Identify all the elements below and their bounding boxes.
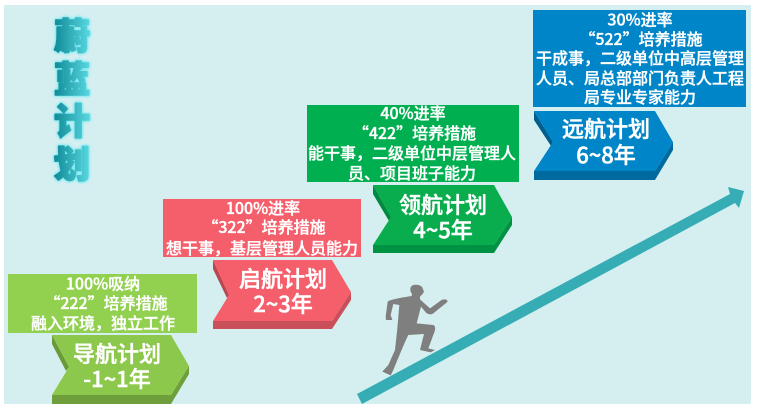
chevron: 导航计划: -1~1年 [83,362,151,394]
title: vertical heading: 蓝 [54,51,90,103]
icon: running person [382,285,447,375]
text box: 导航 measures: 100%吸纳 [66,270,140,294]
text box: 启航 measures: 100%进率 [226,195,300,219]
text box: 远航 measures: “522”培养措施 [579,26,703,50]
chevron: 启航计划: 启航计划 [239,262,327,294]
text box: 远航 measures [533,6,746,108]
title: vertical heading: 划 [54,136,90,188]
title: vertical heading: 计 [54,93,90,145]
text box: 领航 measures: “422”培养措施 [353,120,476,144]
panel: 启航计划 step 2 [163,195,361,329]
chevron: 领航计划: 领航计划 [399,188,487,220]
text box: 导航 measures: “222”培养措施 [44,290,168,314]
text box: 领航 measures [307,100,519,184]
chevron: 启航计划: 2~3年 [253,287,313,319]
title: vertical heading: 蔚 [54,8,90,60]
chevron: 启航计划 [213,260,351,329]
text box: 领航 measures: 40%进率 [380,100,446,124]
chevron: 远航计划: 6~8年 [576,138,636,170]
panel: 远航计划 step 4 [533,6,746,180]
text box: 远航 measures: 干成事，二级单位中高层管理 [536,45,744,69]
chevron: 导航计划: 导航计划 [73,337,161,369]
text box: 领航 measures: 员、项目班子能力 [348,160,476,184]
text box: 启航 measures: 想干事，基层管理人员能力 [166,235,358,259]
chevron: 远航计划: 远航计划 [562,112,650,144]
text box: 启航 measures: “322”培养措施 [202,214,326,238]
text box: 远航 measures: 30%进率 [607,6,673,30]
chevron: 领航计划: 4~5年 [413,213,473,245]
text box: 远航 measures: 人员、局总部部门负责人工程 [536,65,744,89]
text box: 导航 measures: 融入环境，独立工作 [31,310,175,334]
text box: 领航 measures: 能干事，二级单位中层管理人 [308,140,516,164]
arrow: rising growth line [357,187,744,404]
chevron: 领航计划 [373,185,512,253]
title: vertical heading [54,8,90,188]
text box: 远航 measures: 局专业专家能力 [584,84,696,108]
panel: 导航计划 step 1 [8,270,197,404]
text box: 启航 measures [163,195,361,259]
chevron: 远航计划 [534,111,673,180]
chevron: 导航计划 [52,335,189,404]
text box: 导航 measures [8,270,197,334]
panel: 领航计划 step 3 [307,100,519,253]
